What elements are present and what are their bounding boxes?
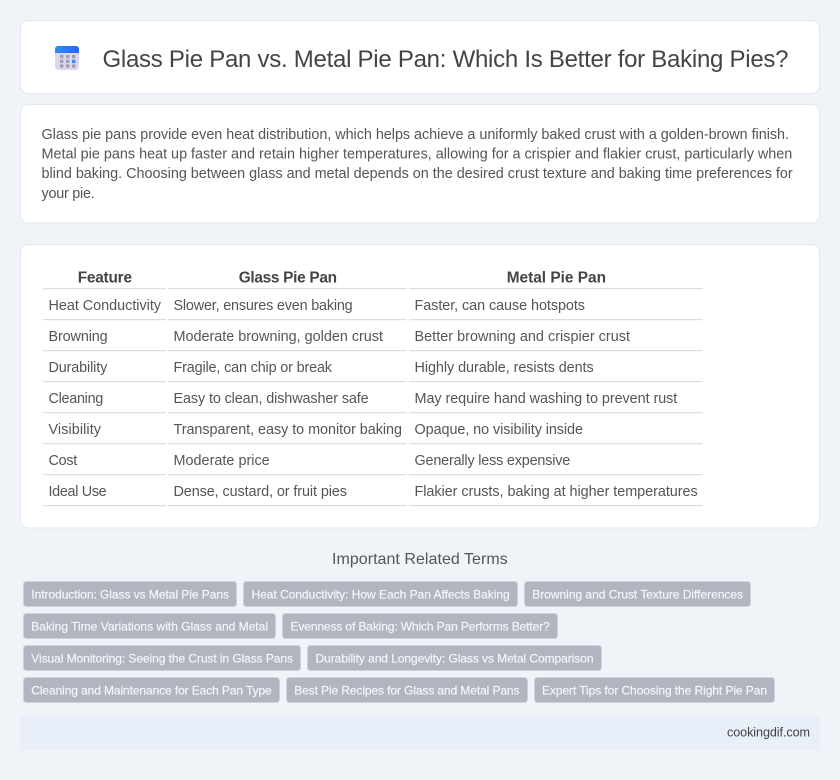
panel: related term tags (24, 582, 774, 702)
table row: heat conductivity (48, 298, 585, 314)
table header row (78, 270, 606, 286)
table header row: Metal Pie Pan (507, 270, 606, 286)
text block: introduction paragraph: your pie. (42, 186, 95, 202)
tag (282, 614, 558, 638)
tag: Evenness of Baking: Which Pan Performs Better? (290, 619, 550, 633)
icon: calendar (55, 46, 79, 70)
tag: Heat Conductivity: How Each Pan Affects Baking (252, 587, 510, 601)
table row: cost (48, 453, 570, 469)
table row: browning: Better browning and crispier crust (414, 329, 630, 345)
table row: heat conductivity: Faster, can cause hotspots (414, 298, 585, 314)
tag (24, 646, 300, 670)
table row: durability (48, 360, 594, 376)
table row: visibility (48, 422, 583, 438)
panel: comparison table (20, 244, 820, 528)
tag (308, 646, 602, 670)
table row: cost: Moderate price (174, 453, 270, 469)
tag (24, 614, 276, 638)
table row: cleaning: Easy to clean, dishwasher safe (174, 391, 369, 407)
table row: ideal use: Ideal Use (48, 484, 107, 500)
table row: cleaning: Cleaning (48, 391, 103, 407)
table row: browning (48, 329, 630, 345)
table row: cost: Generally less expensive (414, 453, 570, 469)
table row: ideal use: Dense, custard, or fruit pies (174, 484, 347, 500)
table row: ideal use (48, 484, 698, 500)
title: Glass Pie Pan vs. Metal Pie Pan: Which Is Better for Baking Pies? (102, 46, 788, 73)
table row: cleaning (48, 391, 677, 407)
table row: visibility: Transparent, easy to monitor baking (174, 422, 402, 438)
tag (524, 582, 750, 606)
panel: introduction (20, 104, 820, 223)
tag: Expert Tips for Choosing the Right Pie Pan (542, 683, 767, 697)
table row: cleaning: May require hand washing to prevent rust (414, 391, 677, 407)
text block: introduction paragraph (42, 127, 793, 202)
tag: Baking Time Variations with Glass and Metal (31, 619, 268, 633)
text block: introduction paragraph: blind baking. Choosing between glass and metal depends on the desired crust texture and baking time preferences for (42, 166, 793, 182)
tag: Best Pie Recipes for Glass and Metal Pans (294, 683, 520, 697)
text block: introduction paragraph: Glass pie pans provide even heat distribution, which helps achieve a uniformly baked crust with a golden-brown finish. (42, 127, 789, 143)
tag (24, 678, 280, 702)
footer (20, 716, 820, 750)
tag: Visual Monitoring: Seeing the Crust in Glass Pans (31, 651, 293, 665)
tag: Durability and Longevity: Glass vs Metal Comparison (316, 651, 594, 665)
table row: cost: Cost (48, 453, 77, 469)
table row: visibility: Visibility (48, 422, 102, 438)
table row: durability: Highly durable, resists dents (414, 360, 594, 376)
table row: durability: Durability (48, 360, 108, 376)
table row: browning: Moderate browning, golden crust (174, 329, 383, 345)
text block: introduction paragraph: Metal pie pans heat up faster and retain higher temperatures, allowing for a crispier and flakier crust, particularly when (42, 147, 792, 163)
tag (286, 678, 528, 702)
table row: visibility: Opaque, no visibility inside (414, 422, 583, 438)
heading: important related terms: Important Related Terms (332, 551, 508, 568)
table header row: Glass Pie Pan (239, 270, 337, 286)
table row: heat conductivity: Slower, ensures even baking (174, 298, 353, 314)
table row: heat conductivity: Heat Conductivity (48, 298, 162, 314)
table row: durability: Fragile, can chip or break (174, 360, 333, 376)
table row: ideal use: Flakier crusts, baking at higher temperatures (414, 484, 698, 500)
tag (24, 582, 236, 606)
footer: cookingdif.com (727, 726, 810, 740)
tag: Introduction: Glass vs Metal Pie Pans (31, 587, 229, 601)
table row: browning: Browning (48, 329, 108, 345)
panel: header (20, 20, 820, 94)
tag (244, 582, 518, 606)
tag: Cleaning and Maintenance for Each Pan Type (31, 683, 272, 697)
tag: Browning and Crust Texture Differences (532, 587, 743, 601)
tag (534, 678, 774, 702)
table header row: Feature (78, 270, 132, 286)
